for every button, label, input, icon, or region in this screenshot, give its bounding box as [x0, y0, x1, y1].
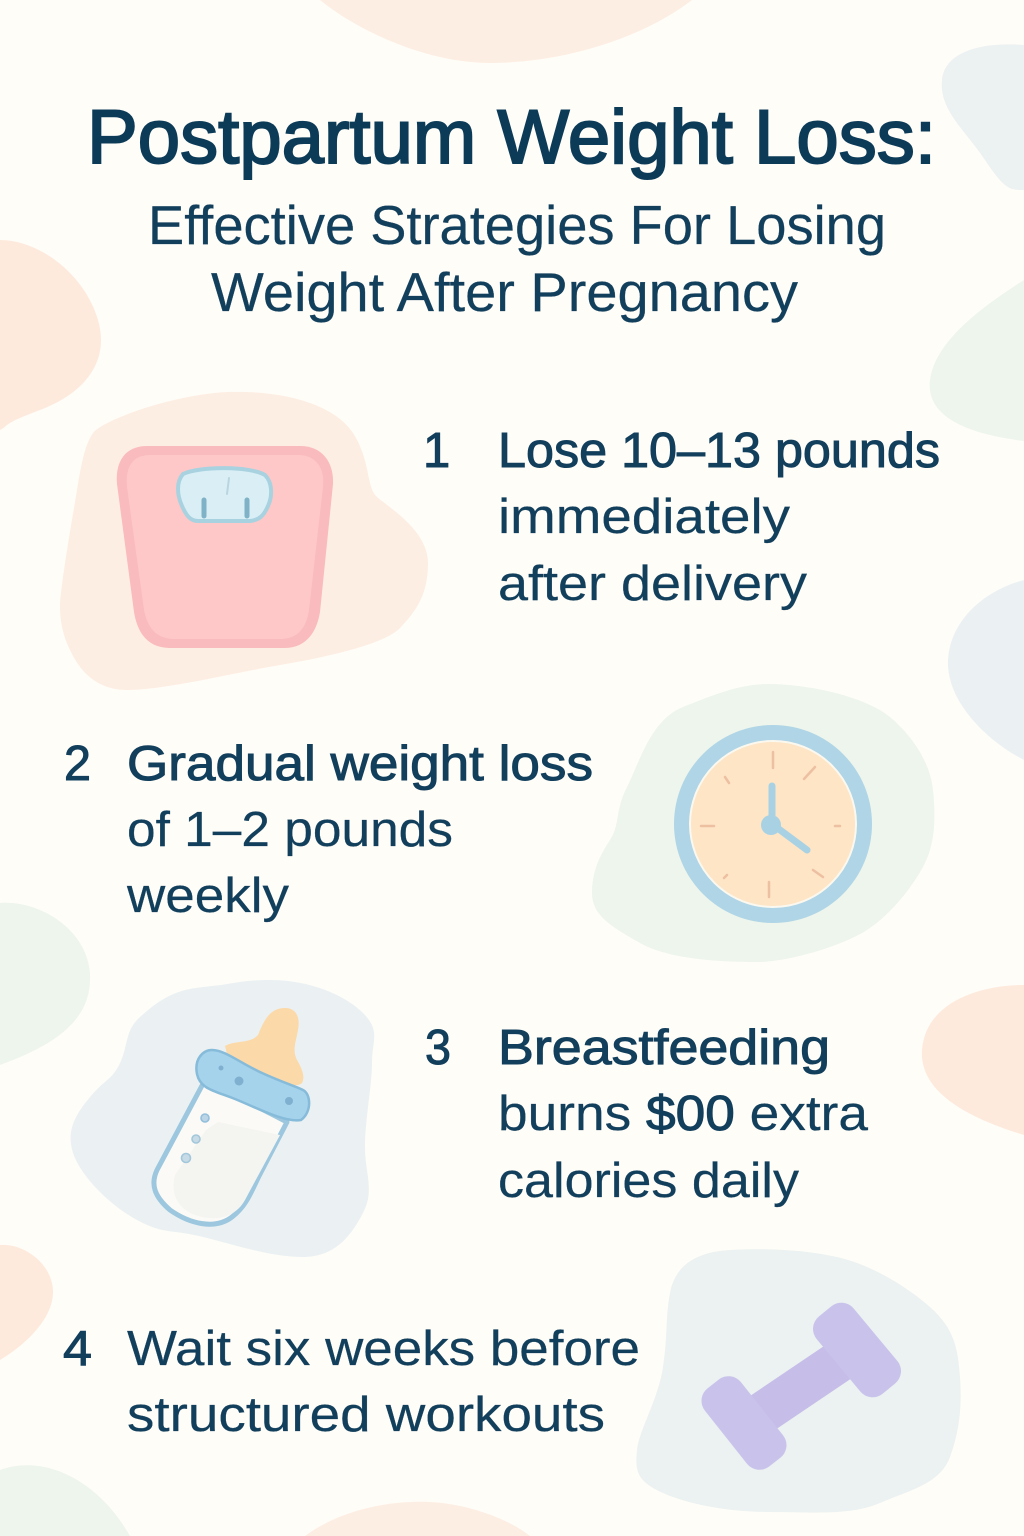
text: step 3: calories daily	[498, 1154, 800, 1208]
subtitle: Weight After Pregnancy	[211, 261, 798, 323]
step number 3: 3	[425, 1021, 451, 1075]
text: step 2: weekly	[126, 869, 290, 923]
text: step 3	[498, 1021, 869, 1208]
text: step 3: Breastfeeding	[498, 1021, 830, 1075]
text: step 1: Lose 10–13 pounds	[498, 424, 940, 478]
text: step 1: after delivery	[498, 557, 808, 611]
panel: strategy 4	[63, 1249, 961, 1513]
text: step 4	[127, 1322, 640, 1442]
panel: strategy 1	[60, 392, 940, 690]
icon: dumbbell	[636, 1249, 961, 1513]
subtitle: Effective Strategies For Losing	[148, 194, 886, 256]
text: step 2: of 1–2 pounds	[127, 803, 453, 857]
text: step 1: immediately	[498, 490, 791, 544]
panel: strategy 2	[64, 684, 934, 962]
text: step 2	[126, 737, 593, 923]
text: step 3: burns $00 extra	[498, 1087, 869, 1141]
icon: baby bottle	[71, 980, 374, 1257]
icon: bathroom scale	[60, 392, 428, 690]
title: Postpartum Weight Loss:	[87, 95, 936, 180]
step number 2: 2	[64, 737, 91, 791]
panel: strategy 3	[71, 980, 869, 1257]
text: step 4: Wait six weeks before	[127, 1322, 640, 1376]
step number 4: 4	[63, 1322, 92, 1376]
icon: clock	[592, 684, 934, 962]
step number 1: 1	[423, 424, 450, 478]
subtitle	[148, 194, 886, 323]
text: step 1	[498, 424, 940, 611]
text: step 4: structured workouts	[127, 1388, 605, 1442]
text: step 2: Gradual weight loss	[127, 737, 593, 791]
